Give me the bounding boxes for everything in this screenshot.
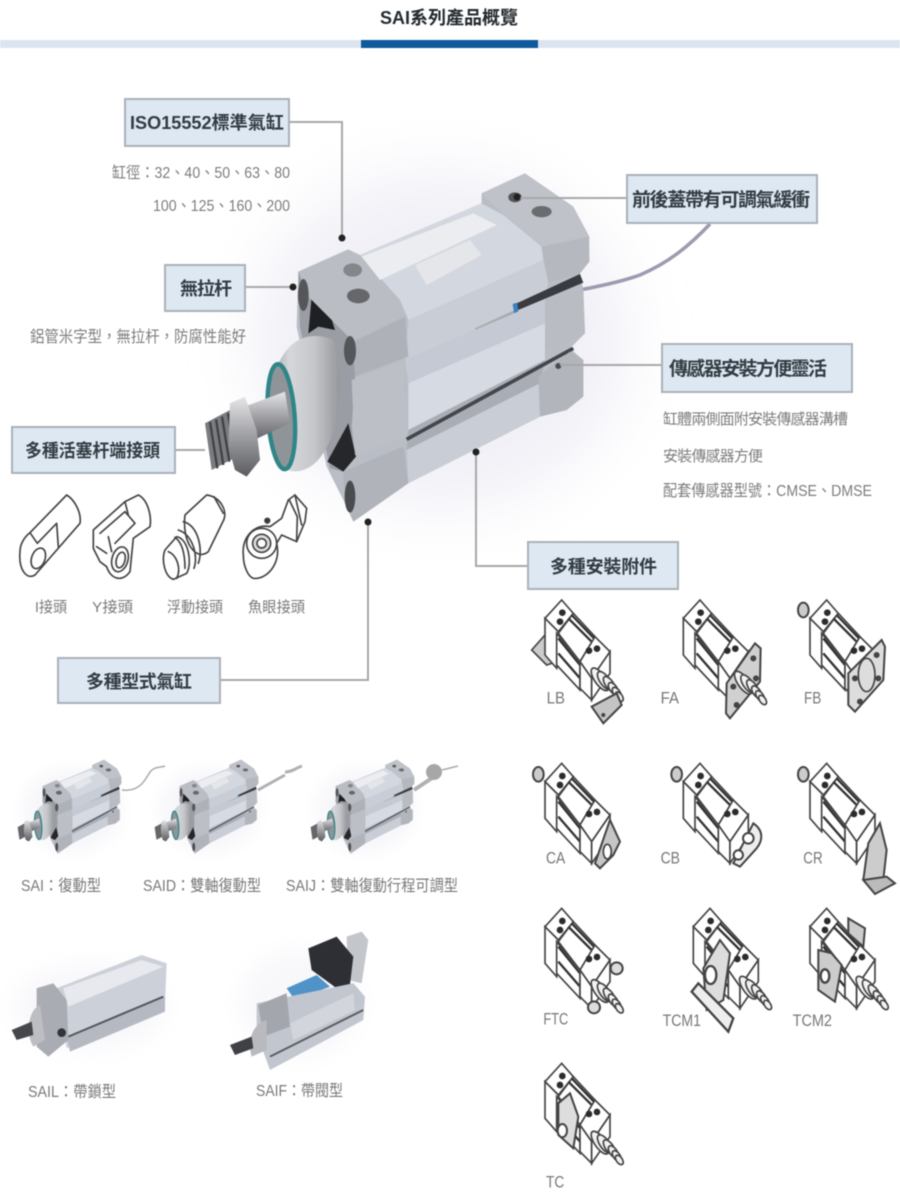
main cylinder photo (205, 170, 710, 522)
text: sensor description: 缸體兩側面附安裝傳感器溝槽 (663, 410, 848, 428)
diagram: CR mount (798, 763, 895, 894)
leader line: adjustable cushion (514, 194, 627, 200)
leader line: rod end joint (175, 449, 205, 451)
callout: sensor mounting: 傳感器安裝方便靈活 (669, 357, 827, 380)
photo: SAID double rod (155, 760, 302, 854)
callout: mounting accessories: 多種安裝附件 (550, 556, 657, 577)
leader line: ISO15552 (289, 122, 346, 242)
label: SAIJ: SAIJ：雙軸復動行程可調型 (286, 877, 458, 895)
text: joint labels: I接頭 (35, 599, 67, 616)
diagram: FA mount: FA (661, 688, 680, 707)
diagram: FTC mount (543, 908, 625, 1028)
text: joint labels: 浮動接頭 (167, 599, 223, 616)
icon: Y joint (93, 495, 150, 578)
callout: no tie rod: 無拉杆 (180, 278, 232, 299)
callout: rod end joints: 多種活塞杆端接頭 (25, 440, 160, 461)
callout: sensor mounting (662, 344, 852, 392)
callout: mounting accessories (528, 542, 678, 589)
text: bore sizes: 缸徑：32、40、50、63、80 (112, 163, 290, 182)
diagram: TCM1 mount: TCM1 (663, 1011, 701, 1030)
title: SAI系列產品概覽 (380, 7, 518, 28)
label: SAIL: SAIL：帶鎖型 (28, 1083, 116, 1101)
label: SAIF: SAIF：帶閥型 (256, 1082, 343, 1100)
callout: multiple cylinder types (58, 658, 220, 703)
callout: ISO15552 standard cylinder (125, 99, 289, 146)
label: SAID: SAID：雙軸復動型 (143, 877, 261, 895)
callout: ISO15552 standard cylinder: ISO15552標準氣缸 (130, 112, 284, 133)
photo: SAIL locking type (12, 955, 167, 1057)
callout: multiple cylinder types: 多種型式氣缸 (86, 671, 192, 692)
text: bore sizes (112, 163, 290, 215)
photo: SAI double-acting (18, 760, 165, 854)
callout: no tie rod (165, 265, 245, 311)
icon: rod eye joint (243, 495, 307, 578)
callout: rod end joints (12, 427, 175, 473)
diagram: LB mount: LB (547, 688, 565, 707)
icon: floating joint (163, 495, 225, 579)
leader line: multiple cylinder types (220, 518, 372, 680)
text: no tie rod description: 鋁管米字型，無拉杆，防腐性能好 (30, 327, 246, 346)
callout: adjustable cushion: 前後蓋帶有可調氣緩衝 (632, 189, 810, 211)
photo: SAIF with valve (230, 932, 368, 1070)
diagram: FA mount (661, 600, 768, 718)
text: joint labels (35, 599, 305, 616)
text: sensor description: 安裝傳感器方便 (663, 447, 763, 465)
leader line: sensor mount (560, 364, 662, 366)
diagram: LB mount (532, 600, 625, 723)
text: joint labels: Y接頭 (92, 599, 133, 616)
text: sensor description (663, 410, 872, 500)
diagram: FTC mount: FTC (543, 1009, 568, 1028)
label: SAI: SAI：復動型 (21, 877, 101, 895)
leader line: no tie rod (245, 284, 296, 290)
diagram: TCM2 mount: TCM2 (793, 1011, 832, 1030)
text: bore sizes: 100、125、160、200 (153, 198, 290, 215)
diagram: TCM1 mount (663, 908, 773, 1032)
diagram: FB mount: FB (804, 688, 821, 707)
diagram: CA mount: CA (546, 848, 566, 867)
diagram: TC mount (545, 1063, 625, 1191)
header bar (0, 40, 900, 48)
diagram: TC mount: TC (546, 1172, 564, 1191)
leader line: mounting accessories (472, 448, 528, 566)
text: sensor description: 配套傳感器型號：CMSE、DMSE (663, 481, 872, 500)
diagram: CB mount (661, 763, 761, 867)
diagram: CA mount (533, 763, 620, 868)
photo: SAIJ stroke adjustable (311, 760, 458, 854)
diagram: TCM2 mount (793, 908, 890, 1030)
icon: I joint (20, 495, 80, 576)
diagram: CB mount: CB (661, 848, 680, 867)
text: joint labels: 魚眼接頭 (248, 599, 305, 616)
diagram: FB mount (798, 600, 885, 712)
callout: adjustable cushion (627, 175, 817, 223)
diagram: CR mount: CR (803, 848, 823, 867)
